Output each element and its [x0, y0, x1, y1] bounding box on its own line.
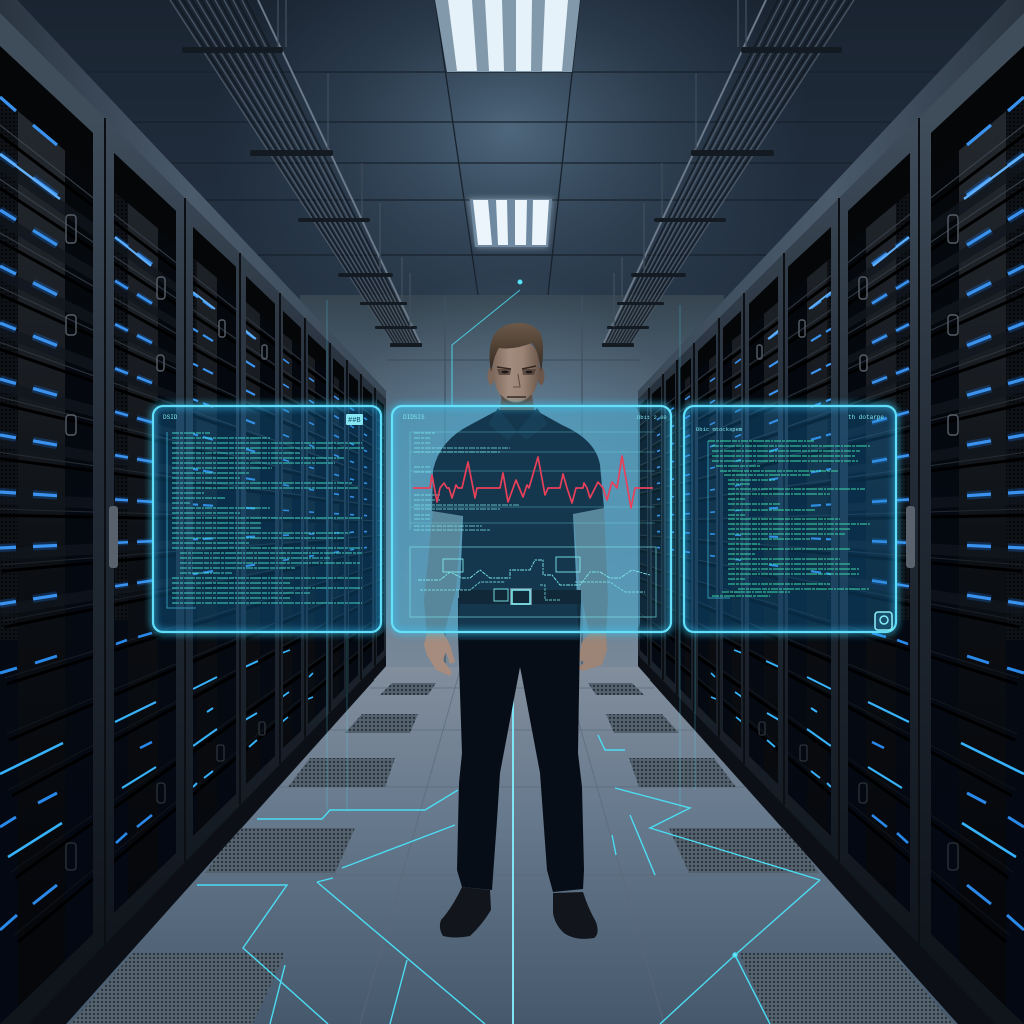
- right shoe: [553, 892, 598, 939]
- panel: right code screen: [684, 406, 896, 632]
- rack frame: [0, 0, 386, 1024]
- left server rack and cable tray: [0, 0, 530, 1024]
- door latch: [109, 506, 118, 568]
- ceiling light: rear: [468, 198, 553, 248]
- right screen icon: [875, 612, 892, 630]
- lower near LEDs: [0, 656, 57, 930]
- right forearm: [573, 506, 608, 637]
- right server rack and cable tray: [494, 0, 1024, 1024]
- center screen header left: DIDSIS: [403, 414, 425, 421]
- left screen badge: [346, 414, 363, 425]
- ceiling: [0, 0, 1024, 360]
- LED strips far cabinets: [283, 358, 741, 722]
- LED strips second cabinet: [0, 154, 513, 843]
- lower second LEDs: [116, 633, 152, 843]
- lower near long LEDs: [0, 743, 63, 857]
- right ear: [538, 367, 544, 385]
- left screen code lines: [172, 433, 364, 603]
- panel: left code screen: [153, 406, 381, 632]
- upper door handles: [66, 215, 267, 435]
- server doors: [0, 0, 530, 1024]
- belt: [459, 590, 581, 604]
- left forearm: [424, 510, 462, 637]
- stubble shadow: [500, 394, 532, 406]
- center screen header right: Dbit 2 60: [637, 414, 667, 421]
- right screen code lines: [708, 441, 870, 596]
- LED strips near cabinet: [0, 97, 513, 930]
- back wall: [300, 270, 724, 680]
- right screen header left: Dbic mtockspem: [696, 426, 743, 433]
- left ear: [488, 367, 494, 385]
- eye sockets: [497, 369, 536, 375]
- cable tray: [170, 0, 422, 347]
- LED strips third and fourth cabinets: [0, 154, 512, 787]
- floor: [66, 667, 958, 1024]
- polo shirt: [432, 410, 604, 640]
- face: [493, 338, 539, 404]
- circuit diagram box: [410, 547, 656, 617]
- left screen header: DSID: [163, 414, 178, 421]
- center grid lines: [410, 432, 655, 530]
- floor grates: [70, 683, 954, 1024]
- right screen header right: th dotarpe: [848, 414, 884, 421]
- person: [424, 323, 608, 939]
- nose shadow: [513, 374, 520, 387]
- belt buckle: [511, 589, 531, 604]
- left screen badge: ##B: [348, 417, 361, 425]
- center screen backlight: [392, 406, 640, 632]
- lower third LEDs: [193, 661, 258, 787]
- heartbeat line: [413, 456, 653, 508]
- brows and mouth: [497, 366, 536, 397]
- panel: center monitoring screen: [392, 406, 671, 632]
- ceiling light: front: [435, 0, 580, 72]
- right hand: [577, 632, 607, 671]
- hair: [490, 323, 543, 372]
- neck: [498, 395, 536, 422]
- floor and wall circuit lines: [197, 280, 820, 1024]
- left hand: [424, 632, 455, 676]
- rack plinth: [28, 655, 386, 1024]
- lower far LEDs: [282, 650, 313, 722]
- trousers: [457, 598, 584, 892]
- lower second long LEDs: [115, 702, 156, 788]
- rack cornice: [0, 0, 386, 399]
- collar: [488, 408, 548, 440]
- lower door handles: [66, 722, 265, 870]
- center text lines: [414, 433, 520, 530]
- left shoe: [440, 887, 491, 938]
